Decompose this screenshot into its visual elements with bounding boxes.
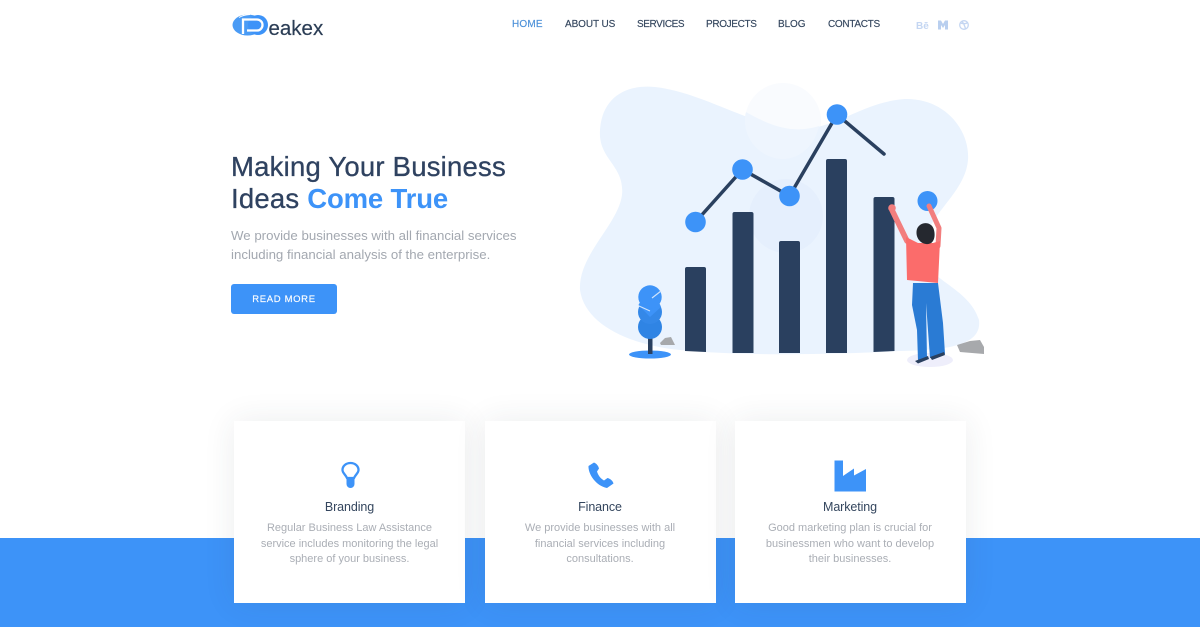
card title: Marketing: [823, 500, 877, 514]
chart bars: [685, 159, 894, 353]
card text: sphere of your business.: [290, 553, 409, 565]
card text: consultations.: [566, 553, 634, 565]
card text: businessmen who want to develop: [766, 538, 934, 550]
hero description: We provide businesses with all financial services: [231, 228, 516, 243]
icon: logo mark: [232, 14, 268, 36]
card text: [261, 522, 438, 565]
background blob: [580, 87, 979, 354]
nav: about us: ABOUT US: [565, 19, 615, 30]
card: marketing: [734, 421, 966, 603]
hero description: including financial analysis of the enterprise.: [231, 246, 490, 262]
hero description: [231, 228, 516, 262]
card text: financial services including: [535, 538, 665, 550]
nav: blog: BLOG: [778, 19, 805, 30]
card text: their businesses.: [809, 553, 891, 565]
nav: services: SERVICES: [637, 19, 684, 30]
icon: factory: [834, 460, 866, 492]
icon: dribbble: [960, 21, 968, 29]
blue footer band: [0, 538, 1200, 627]
social icons: [916, 20, 969, 32]
icon: phone: [588, 462, 614, 488]
read more button: [231, 284, 337, 314]
icon: medium: [938, 20, 948, 30]
small rock: [660, 337, 675, 345]
nav: contacts: CONTACTS: [828, 19, 880, 30]
person reaching for data point: [888, 191, 953, 367]
hero heading: Ideas Come True: [231, 183, 448, 214]
hero illustration: [580, 86, 984, 367]
icon: behance: Bē: [916, 21, 929, 32]
nav: home: HOME: [512, 19, 543, 30]
card text: We provide businesses with all: [525, 522, 675, 534]
tree: [629, 285, 671, 358]
lighter blob accents: [745, 112, 823, 253]
line chart: [685, 104, 884, 232]
logo: [232, 14, 324, 40]
card text: [525, 522, 675, 565]
card text: Regular Business Law Assistance: [267, 522, 432, 534]
navigation: [512, 19, 880, 30]
large rock: [957, 340, 984, 354]
read more button: READ MORE: [252, 294, 316, 305]
card: finance: [484, 421, 716, 603]
logo wordmark: eakex: [268, 17, 323, 40]
card text: service includes monitoring the legal: [261, 538, 438, 550]
icon: light bulb: [341, 462, 360, 488]
nav: projects: PROJECTS: [706, 19, 757, 30]
card: branding: [234, 421, 465, 603]
hero heading: [231, 151, 506, 214]
card text: Good marketing plan is crucial for: [768, 522, 932, 534]
faint circle above blob: [745, 83, 821, 159]
card title: Finance: [578, 500, 622, 514]
card title: Branding: [325, 500, 374, 514]
card text: [766, 522, 934, 565]
hero heading: Making Your Business: [231, 151, 506, 182]
